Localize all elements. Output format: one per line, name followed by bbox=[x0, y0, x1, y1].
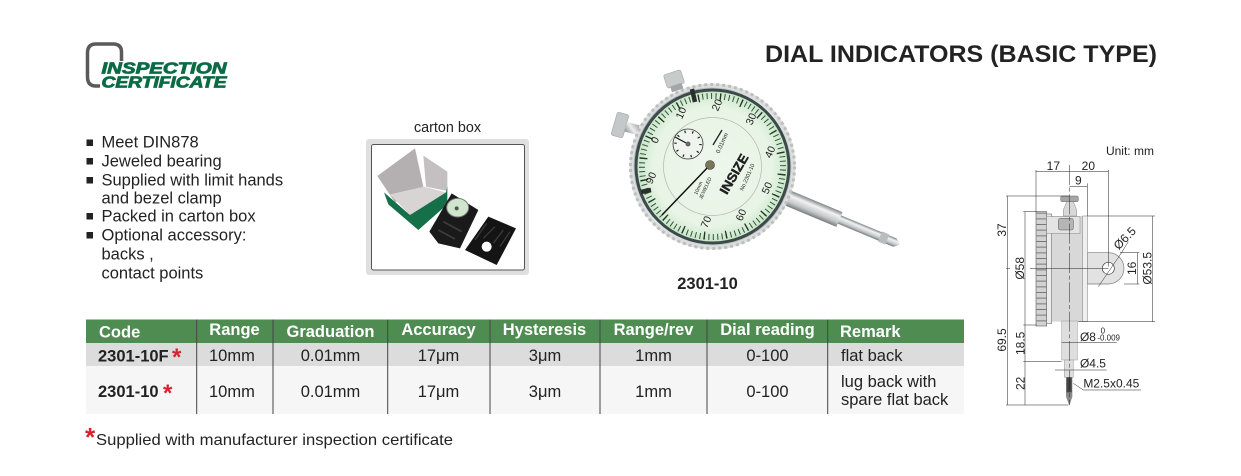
dimension labels: Ø8 bbox=[1080, 330, 1096, 344]
unit label: Unit: mm bbox=[1106, 144, 1154, 158]
row 2301-10 bbox=[98, 373, 949, 409]
logo: inspection certificate: INSPECTION bbox=[102, 60, 228, 78]
dimension labels: 37 bbox=[995, 223, 1009, 237]
model label: 2301-10 bbox=[677, 275, 738, 293]
carton box photo bbox=[366, 139, 529, 275]
dimension labels: Ø53.5 bbox=[1140, 252, 1154, 285]
inner scale ring bbox=[664, 118, 762, 216]
dimension labels bbox=[995, 159, 1154, 390]
foam tray bbox=[429, 193, 478, 248]
logo: inspection certificate bbox=[88, 44, 228, 91]
dial numbers bbox=[644, 97, 778, 230]
logo: inspection certificate: CERTIFICATE bbox=[102, 74, 227, 91]
box flaps bbox=[377, 148, 423, 202]
feature list: Jeweled bearing bbox=[102, 153, 222, 171]
row 2301-10F: 0-100 bbox=[746, 347, 789, 365]
dial indicator photo bbox=[611, 70, 902, 260]
header labels: Accuracy bbox=[401, 321, 476, 339]
dimension drawing bbox=[995, 144, 1155, 406]
header labels: Dial reading bbox=[720, 321, 815, 339]
dial numbers: 90 bbox=[644, 170, 659, 186]
dimension labels: 0 bbox=[1101, 326, 1106, 335]
header labels bbox=[99, 321, 901, 342]
table header band bbox=[86, 320, 964, 343]
feature list: and bezel clamp bbox=[102, 189, 222, 207]
dial legends: 0.01mm bbox=[716, 132, 730, 155]
row 2301-10: lug back with bbox=[841, 373, 936, 391]
row 2301-10: 0-100 bbox=[746, 383, 789, 401]
header labels: Range bbox=[209, 321, 260, 339]
row 2301-10: 17μm bbox=[418, 383, 459, 401]
dial numbers: 50 bbox=[760, 180, 775, 196]
dimension labels: 18.5 bbox=[1013, 331, 1027, 355]
side clamp knob bbox=[611, 112, 642, 142]
feature list: Supplied with limit hands bbox=[102, 172, 283, 190]
row 2301-10: 10mm bbox=[209, 383, 255, 401]
row 2 band bbox=[86, 366, 964, 414]
dial numbers: 30 bbox=[744, 111, 759, 127]
header labels: Range/rev bbox=[614, 321, 694, 339]
dimension labels: 20 bbox=[1082, 159, 1095, 173]
main needle bbox=[662, 160, 714, 215]
indicator side view bbox=[1036, 196, 1124, 406]
dimension labels: Ø4.5 bbox=[1080, 356, 1106, 370]
dimension labels: -0.009 bbox=[1097, 334, 1121, 343]
row 2301-10F: * bbox=[172, 344, 182, 371]
dimension lines bbox=[1006, 165, 1155, 405]
row 2301-10: 2301-10 bbox=[98, 383, 159, 401]
dial legends: JEWELED bbox=[698, 176, 714, 200]
footnote: * bbox=[85, 422, 96, 452]
row 2301-10F: 3μm bbox=[529, 347, 561, 365]
feature list: Meet DIN878 bbox=[102, 134, 199, 152]
row 1 band bbox=[86, 343, 964, 366]
stem bbox=[775, 187, 902, 252]
header labels: Code bbox=[99, 324, 140, 342]
dial legends bbox=[693, 130, 757, 200]
feature list: Packed in carton box bbox=[102, 208, 256, 226]
dial legends: No.2301-10 bbox=[739, 163, 757, 192]
dial numbers: 60 bbox=[734, 207, 749, 223]
dimension labels: 16 bbox=[1125, 261, 1139, 275]
box green sides bbox=[384, 187, 447, 230]
dial numbers: 70 bbox=[699, 214, 714, 230]
header labels: Remark bbox=[840, 323, 901, 341]
row 2301-10: spare flat back bbox=[841, 391, 949, 409]
limit hands bbox=[641, 89, 695, 192]
dimension labels: Ø6.5 bbox=[1111, 224, 1139, 252]
row 2301-10: * bbox=[163, 380, 173, 407]
scale ticks bbox=[619, 73, 806, 260]
dimension labels: 22 bbox=[1013, 376, 1027, 390]
dial legends: INSIZE bbox=[717, 151, 752, 197]
back plate bbox=[465, 217, 516, 265]
dial numbers: 0 bbox=[649, 135, 662, 145]
title: DIAL INDICATORS (BASIC TYPE) bbox=[765, 41, 1157, 68]
row 2301-10: 1mm bbox=[635, 383, 672, 401]
feature list: backs , bbox=[102, 245, 154, 263]
dial numbers: 40 bbox=[763, 144, 778, 160]
dial numbers: 10 bbox=[674, 105, 689, 121]
knurled bezel bbox=[630, 84, 796, 250]
header labels: Hysteresis bbox=[503, 321, 586, 339]
carton box label: carton box bbox=[414, 120, 482, 136]
small revolution dial bbox=[673, 129, 703, 159]
dimension labels: Ø58 bbox=[1013, 257, 1027, 280]
feature list bbox=[86, 134, 283, 282]
row 2301-10F: flat back bbox=[841, 347, 903, 365]
dimension labels: 69.5 bbox=[995, 328, 1009, 352]
header labels: Graduation bbox=[286, 323, 375, 341]
feature list: Optional accessory: bbox=[102, 227, 246, 245]
row 2301-10F: 0.01mm bbox=[301, 347, 360, 365]
specification table bbox=[86, 320, 964, 414]
footnote: Supplied with manufacturer inspection certificate bbox=[96, 432, 453, 449]
box interior bbox=[390, 187, 446, 215]
row 2301-10: 0.01mm bbox=[301, 383, 360, 401]
dial legends: 10mm bbox=[693, 181, 704, 196]
row 2301-10: 3μm bbox=[529, 383, 561, 401]
small dial bbox=[447, 198, 469, 217]
top crown bbox=[663, 70, 686, 93]
row 2301-10F: 2301-10F bbox=[98, 348, 169, 366]
dimension labels: 9 bbox=[1075, 173, 1082, 187]
row 2301-10F: 17μm bbox=[418, 347, 459, 365]
footnote bbox=[85, 422, 453, 452]
dimension labels: M2.5x0.45 bbox=[1083, 376, 1140, 390]
row 2301-10F bbox=[98, 344, 903, 371]
row 2301-10F: 10mm bbox=[209, 347, 255, 365]
dimension labels: 17 bbox=[1047, 159, 1060, 173]
dial numbers: 20 bbox=[710, 97, 725, 113]
row 2301-10F: 1mm bbox=[635, 347, 672, 365]
feature list: contact points bbox=[102, 264, 203, 282]
